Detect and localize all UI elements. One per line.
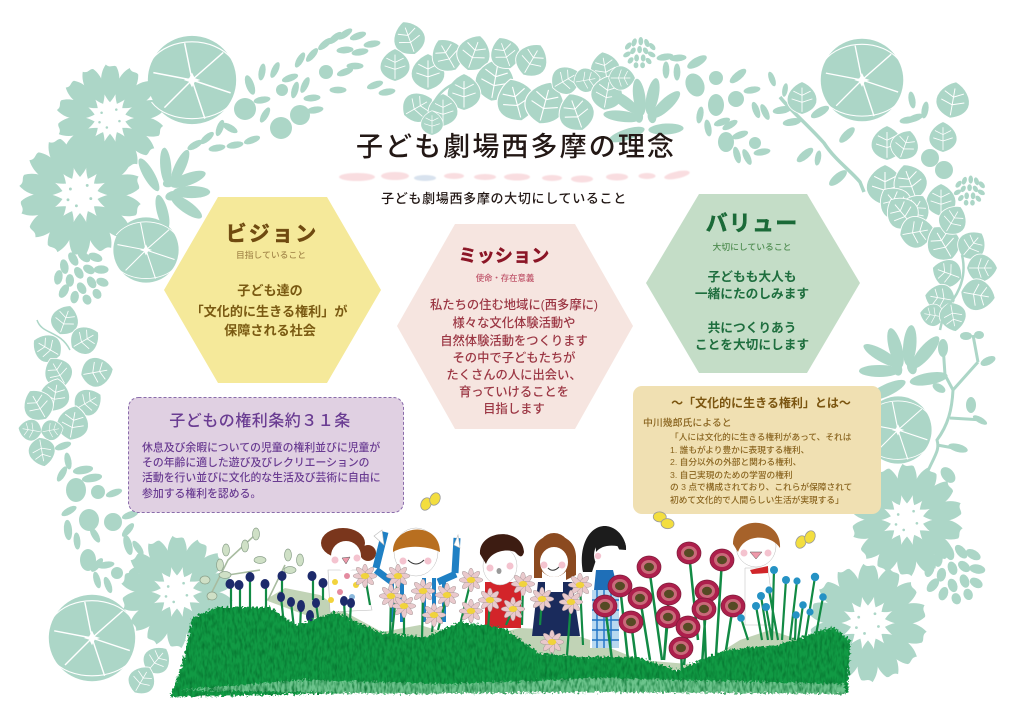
child 2 <box>374 528 460 622</box>
child 6 <box>733 523 780 625</box>
article 31 heading: 子どもの権利条約３１条 <box>169 412 351 430</box>
vision body: 「文化的に生きる権利」が <box>191 303 347 319</box>
mission heading: ミッション <box>458 246 550 266</box>
panel: cultural rights box <box>633 386 881 514</box>
icon: butterfly centre <box>650 506 678 535</box>
title: 子ども劇場西多摩の理念 <box>356 132 676 162</box>
red flowers <box>593 542 745 672</box>
article 31 body: 休息及び余暇についての児童の権利並びに児童が <box>142 440 380 454</box>
article 31 body: 活動を行い並びに文化的な生活及び芸術に自由に <box>142 470 381 484</box>
right lower flowers <box>808 396 996 682</box>
mission body: 私たちの住む地域に(西多摩に) <box>430 297 598 312</box>
article 31 body: その年齢に適した遊び及びレクリエーションの <box>142 455 370 469</box>
cultural rights quote: 3. 自己実現のための学習の権利 <box>670 469 793 480</box>
panel: value hexagon <box>646 194 860 373</box>
panel: article 31 box <box>128 398 404 512</box>
left leaf vine <box>16 301 116 469</box>
top-left leaf sprays and berries <box>186 26 396 153</box>
cultural rights quote: 2. 自分以外の外部と関わる権利、 <box>670 456 801 467</box>
mission body: 目指します <box>483 401 545 416</box>
cultural rights quote: 初めて文化的で人間らしい生活が実現する」 <box>670 494 844 505</box>
icon: butterfly left <box>419 491 442 512</box>
cultural rights heading: 〜「文化的に生きる権利」とは〜 <box>671 395 851 410</box>
right protea and sprig <box>849 316 997 486</box>
child 4 <box>532 533 580 636</box>
value sublabel: 大切にしていること <box>713 241 791 252</box>
bush backdrop <box>265 588 800 670</box>
panel: mission hexagon <box>397 224 633 429</box>
top-right flower and branch <box>767 39 986 232</box>
article 31 body: 参加する権利を認める。 <box>142 486 261 500</box>
bottom-left flowers <box>49 536 234 700</box>
cultural rights quote: 1. 誰もがより豊かに表現する権利、 <box>670 444 809 455</box>
top-left flowers <box>18 36 236 316</box>
leafy sprigs <box>200 528 304 600</box>
child 3 <box>480 534 524 628</box>
value heading: バリュー <box>706 211 798 236</box>
navy bud plants <box>226 571 355 635</box>
value body: 一緒にたのしみます <box>695 287 809 301</box>
child 1 <box>321 528 376 612</box>
mission body: 様々な文化体験活動や <box>453 315 575 330</box>
blue bud plants <box>737 566 827 640</box>
vision body: 子ども達の <box>237 282 303 298</box>
mission body: たくさんの人に出会い、 <box>446 368 582 382</box>
grass hill <box>170 607 850 697</box>
mission body: 育っていけることを <box>459 384 569 399</box>
cultural rights quote: 「人には文化的に生きる権利があって、それは <box>670 431 852 442</box>
top-right berry spray <box>656 52 772 166</box>
child 5 <box>582 526 626 648</box>
subtitle: 子ども劇場西多摩の大切にしていること <box>381 191 627 206</box>
mission sublabel: 使命・存在意義 <box>476 273 535 283</box>
panel: vision hexagon <box>164 197 381 383</box>
mission body: 自然体験活動をつくります <box>440 333 588 348</box>
illustration: children and garden <box>170 523 850 697</box>
vision heading: ビジョン <box>226 223 318 246</box>
vision sublabel: 目指していること <box>236 249 306 260</box>
pink daisies <box>353 564 592 655</box>
cultural rights quote: の 3 点で構成されており、これらが保障されて <box>670 481 852 492</box>
value body: 子どもも大人も <box>708 269 796 284</box>
cultural rights attribution: 中川幾郎氏によると <box>643 416 732 429</box>
top leaf garland <box>380 16 689 146</box>
vision body: 保障される社会 <box>224 322 316 338</box>
value body: 共につくりあう <box>708 321 796 335</box>
right leaf vine <box>879 189 998 334</box>
value body: ことを大切にします <box>695 337 809 352</box>
icon: butterfly right <box>794 529 817 550</box>
decorative petal strip <box>339 169 690 182</box>
left berry spray <box>54 440 146 594</box>
mission body: その中で子どもたちが <box>453 350 576 365</box>
